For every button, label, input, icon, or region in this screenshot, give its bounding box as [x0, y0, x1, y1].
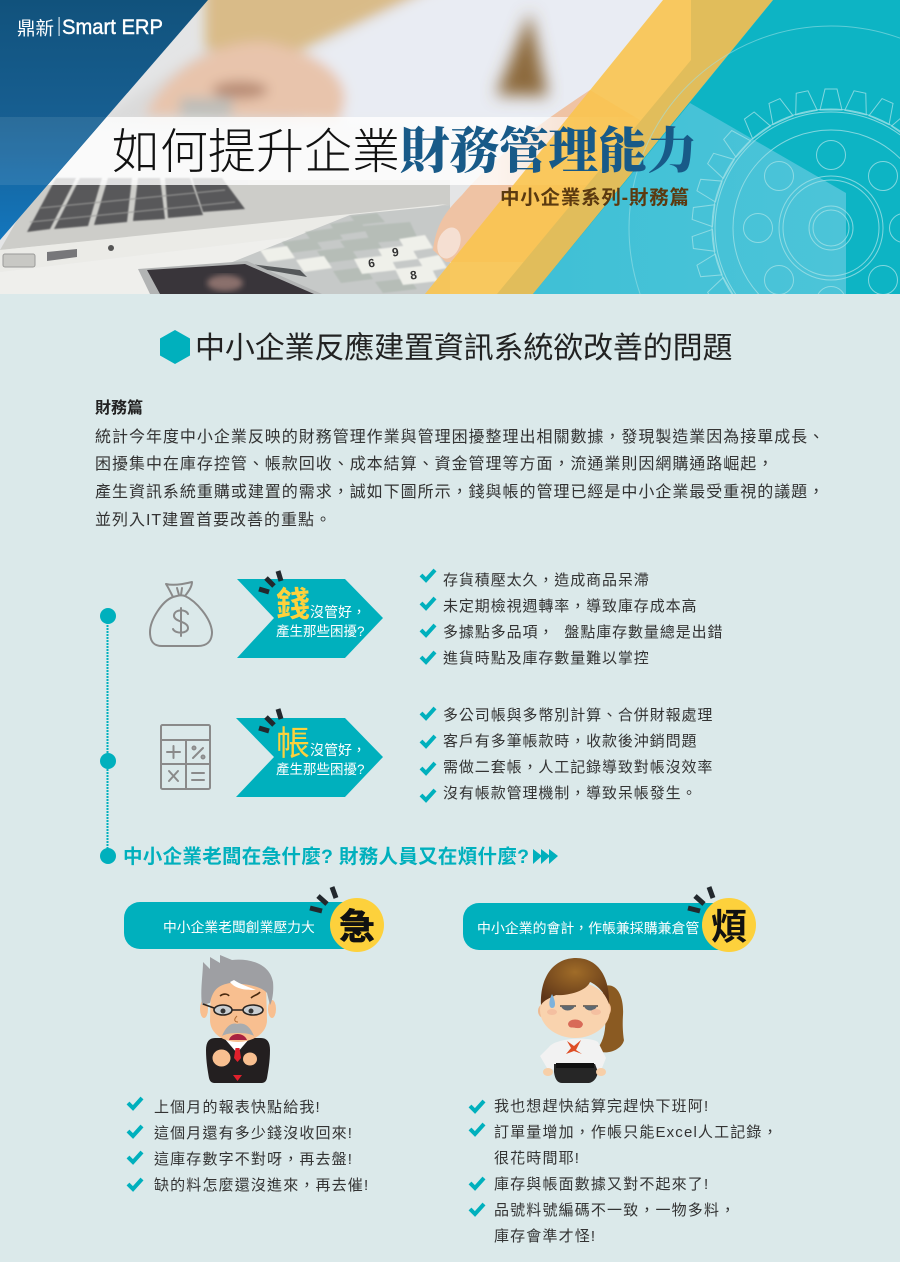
- checklist: accountant quotes: 我也想趕快結算完趕快下班阿!: [494, 1098, 709, 1115]
- checklist: money problems: 進貨時點及庫存數量難以掌控: [443, 649, 650, 667]
- icon: calculator: [161, 725, 210, 789]
- pill: accountant: [463, 887, 756, 952]
- logo: [18, 17, 162, 37]
- checklist: boss quotes: 這個月還有多少錢沒收回來!: [154, 1124, 353, 1142]
- calculator digits: [368, 248, 417, 280]
- checklist: money problems: 多據點多品項， 盤點庫存數量總是出錯: [443, 623, 723, 641]
- title: 財務管理能力: [400, 124, 697, 179]
- checklist: accountant quotes: 訂單量增加，作帳只能Excel人工記錄，: [494, 1124, 779, 1141]
- teal panel: [533, 0, 900, 294]
- pill: accountant: 中小企業的會計，作帳兼採購兼倉管: [477, 920, 699, 936]
- calculator digits: 9: [391, 245, 400, 260]
- icon: money bag: [150, 582, 212, 646]
- pill: boss: 中小企業老闆創業壓力大: [163, 919, 315, 935]
- intro text block: 統計今年度中小企業反映的財務管理作業與管理困擾整理出相關數據，發現製造業因為接單成長、: [95, 427, 825, 446]
- intro text block: 財務篇: [95, 398, 143, 417]
- banner: accounts: [236, 709, 383, 797]
- checklist: accountant quotes: 庫存會準才怪!: [494, 1228, 596, 1245]
- checklist: account problems: 多公司帳與多幣別計算、合併財報處理: [443, 706, 713, 724]
- checklist: account problems: 需做二套帳，人工記錄導致對帳沒效率: [443, 759, 713, 776]
- calculator digits: 6: [367, 256, 376, 271]
- checklist: account problems: 客戶有多筆帳款時，收款後沖銷問題: [443, 732, 697, 750]
- banner: money: 產生那些困擾?: [276, 623, 365, 639]
- logo: Smart ERP: [62, 16, 163, 39]
- banner: accounts: 沒管好，: [310, 742, 366, 758]
- checklist: accountant quotes: [470, 1098, 779, 1245]
- checklist: account problems: [421, 706, 713, 802]
- white title band: [48, 117, 568, 185]
- checklist: money problems: [421, 570, 723, 667]
- hero banner: [0, 0, 900, 294]
- pill: boss: [124, 887, 384, 952]
- timeline: [100, 608, 116, 864]
- banner: accounts: 帳: [276, 725, 310, 763]
- checklist: boss quotes: [128, 1098, 369, 1194]
- checklist: money problems: 存貨積壓太久，造成商品呆滯: [443, 571, 650, 589]
- icon: triple arrows: [533, 849, 558, 864]
- intro text block: [95, 398, 825, 529]
- section heading: [160, 330, 732, 365]
- intro text block: 並列入IT建置首要改善的重點。: [95, 511, 332, 529]
- title: [114, 125, 694, 173]
- checklist: boss quotes: 上個月的報表快點給我!: [154, 1099, 321, 1116]
- illustration: tired accountant: [538, 958, 624, 1083]
- subtitle: 中小企業系列-財務篇: [500, 186, 689, 209]
- banner: accounts: 產生那些困擾?: [276, 761, 365, 777]
- intro text block: 產生資訊系統重購或建置的需求，誠如下圖所示，錢與帳的管理已經是中小企業最受重視的議題，: [95, 482, 825, 501]
- banner: money: [237, 571, 383, 658]
- calculator digits: 8: [409, 268, 418, 283]
- checklist: account problems: 沒有帳款管理機制，導致呆帳發生。: [443, 784, 697, 802]
- illustration: angry boss: [200, 955, 276, 1083]
- pill: boss: 急: [339, 906, 375, 947]
- gear graphic: [628, 26, 900, 294]
- logo: 鼎新: [17, 18, 54, 39]
- yellow diagonal band: [425, 0, 773, 294]
- checklist: accountant quotes: 很花時間耶!: [494, 1150, 580, 1167]
- checklist: boss quotes: 缺的料怎麼還沒進來，再去催!: [154, 1176, 369, 1194]
- subheading with arrows: 中小企業老闆在急什麼? 財務人員又在煩什麼?: [123, 845, 529, 868]
- checklist: money problems: 未定期檢視週轉率，導致庫存成本高: [443, 598, 697, 615]
- calculator keys: [282, 213, 418, 293]
- blue corner triangle: [0, 0, 208, 240]
- icon: hexagon: [160, 330, 190, 364]
- banner: money: 沒管好，: [310, 604, 366, 620]
- hero photo: laptop, calculator and hands: [0, 0, 663, 294]
- pill: accountant: 煩: [711, 906, 747, 947]
- checklist: accountant quotes: 庫存與帳面數據又對不起來了!: [494, 1176, 709, 1193]
- heading text: 中小企業反應建置資訊系統欲改善的問題: [195, 332, 732, 365]
- intro text block: 困擾集中在庫存控管、帳款回收、成本結算、資金管理等方面，流通業則因網購通路崛起，: [95, 454, 774, 473]
- title: 如何提升企業: [112, 126, 400, 179]
- banner: money: 錢: [276, 586, 310, 624]
- checklist: accountant quotes: 品號料號編碼不一致，一物多料，: [494, 1201, 736, 1219]
- checklist: boss quotes: 這庫存數字不對呀，再去盤!: [154, 1150, 353, 1168]
